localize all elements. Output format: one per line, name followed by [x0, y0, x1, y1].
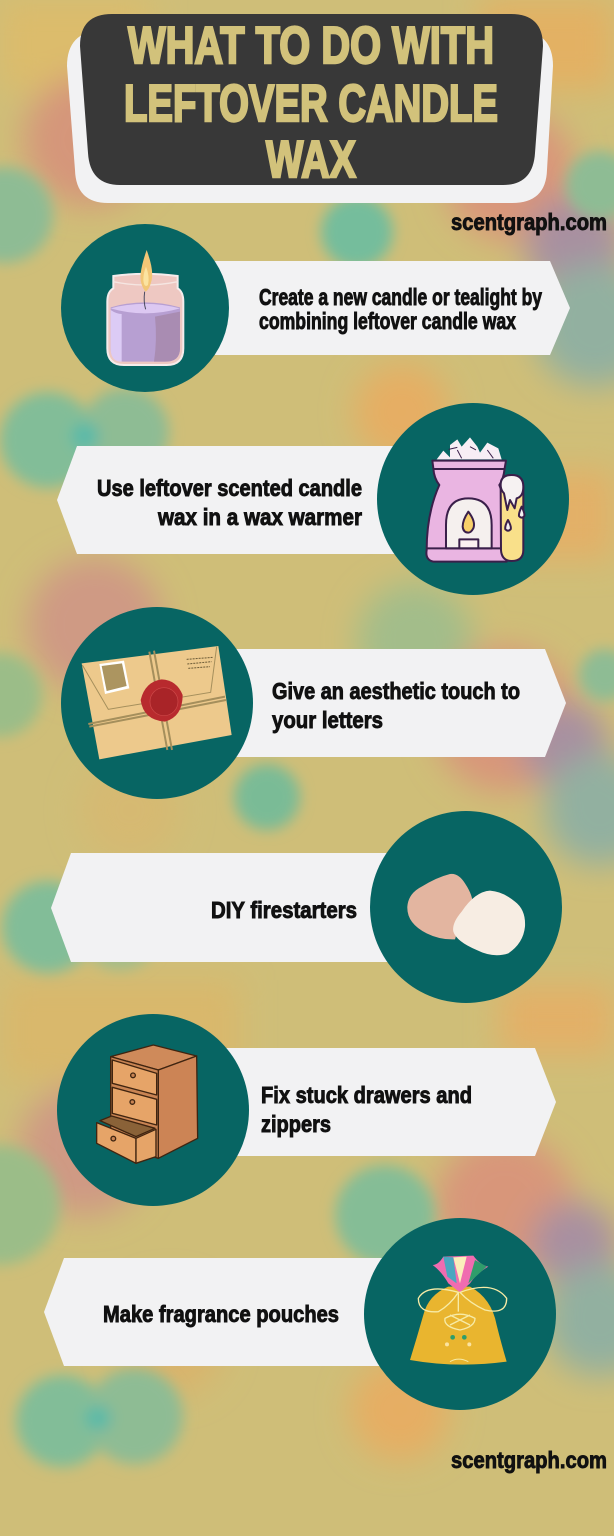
circle 3	[61, 607, 253, 799]
text 2	[97, 475, 362, 530]
text 5	[261, 1082, 472, 1137]
item 1: new candle	[61, 224, 570, 392]
icon: sealed envelope	[82, 646, 232, 759]
text 2: wax in a wax warmer	[157, 504, 362, 530]
icon: wax pieces	[407, 874, 525, 955]
icon: pouch	[410, 1256, 507, 1365]
ribbon 1	[205, 261, 570, 355]
item 3: letters	[61, 607, 566, 799]
text 1: combining leftover candle wax	[259, 308, 516, 334]
title text	[124, 17, 498, 189]
item 2: wax warmer	[57, 403, 569, 595]
icon: chest of drawers	[97, 1045, 198, 1163]
text 5: Fix stuck drawers and	[261, 1082, 472, 1108]
circle 1	[61, 224, 229, 392]
circle 6	[364, 1218, 556, 1410]
text 3	[272, 678, 520, 733]
ribbon 6	[44, 1258, 400, 1366]
text 5: zippers	[261, 1111, 331, 1137]
ribbon 4	[51, 853, 410, 962]
ribbon 3	[200, 649, 566, 757]
text 3: Give an aesthetic touch to	[272, 678, 520, 704]
text 1	[259, 284, 542, 334]
item 5: drawers	[57, 1014, 556, 1206]
title text: WHAT TO DO WITH	[128, 17, 494, 75]
text 3: your letters	[272, 707, 383, 733]
text 4: DIY firestarters	[211, 897, 357, 923]
ribbon 2	[57, 446, 420, 554]
ribbon 5	[200, 1048, 556, 1156]
text 6: Make fragrance pouches	[103, 1301, 339, 1327]
item 6: fragrance pouches	[44, 1218, 556, 1410]
title banner	[67, 14, 553, 203]
circle 2	[377, 403, 569, 595]
title text: WAX	[266, 131, 356, 189]
icon: candle jar	[107, 250, 183, 365]
icon: wax warmer	[426, 437, 524, 562]
circle 4	[370, 811, 562, 1003]
text 2: Use leftover scented candle	[97, 475, 362, 501]
circle 5	[57, 1014, 249, 1206]
item 4: firestarters	[51, 811, 562, 1003]
